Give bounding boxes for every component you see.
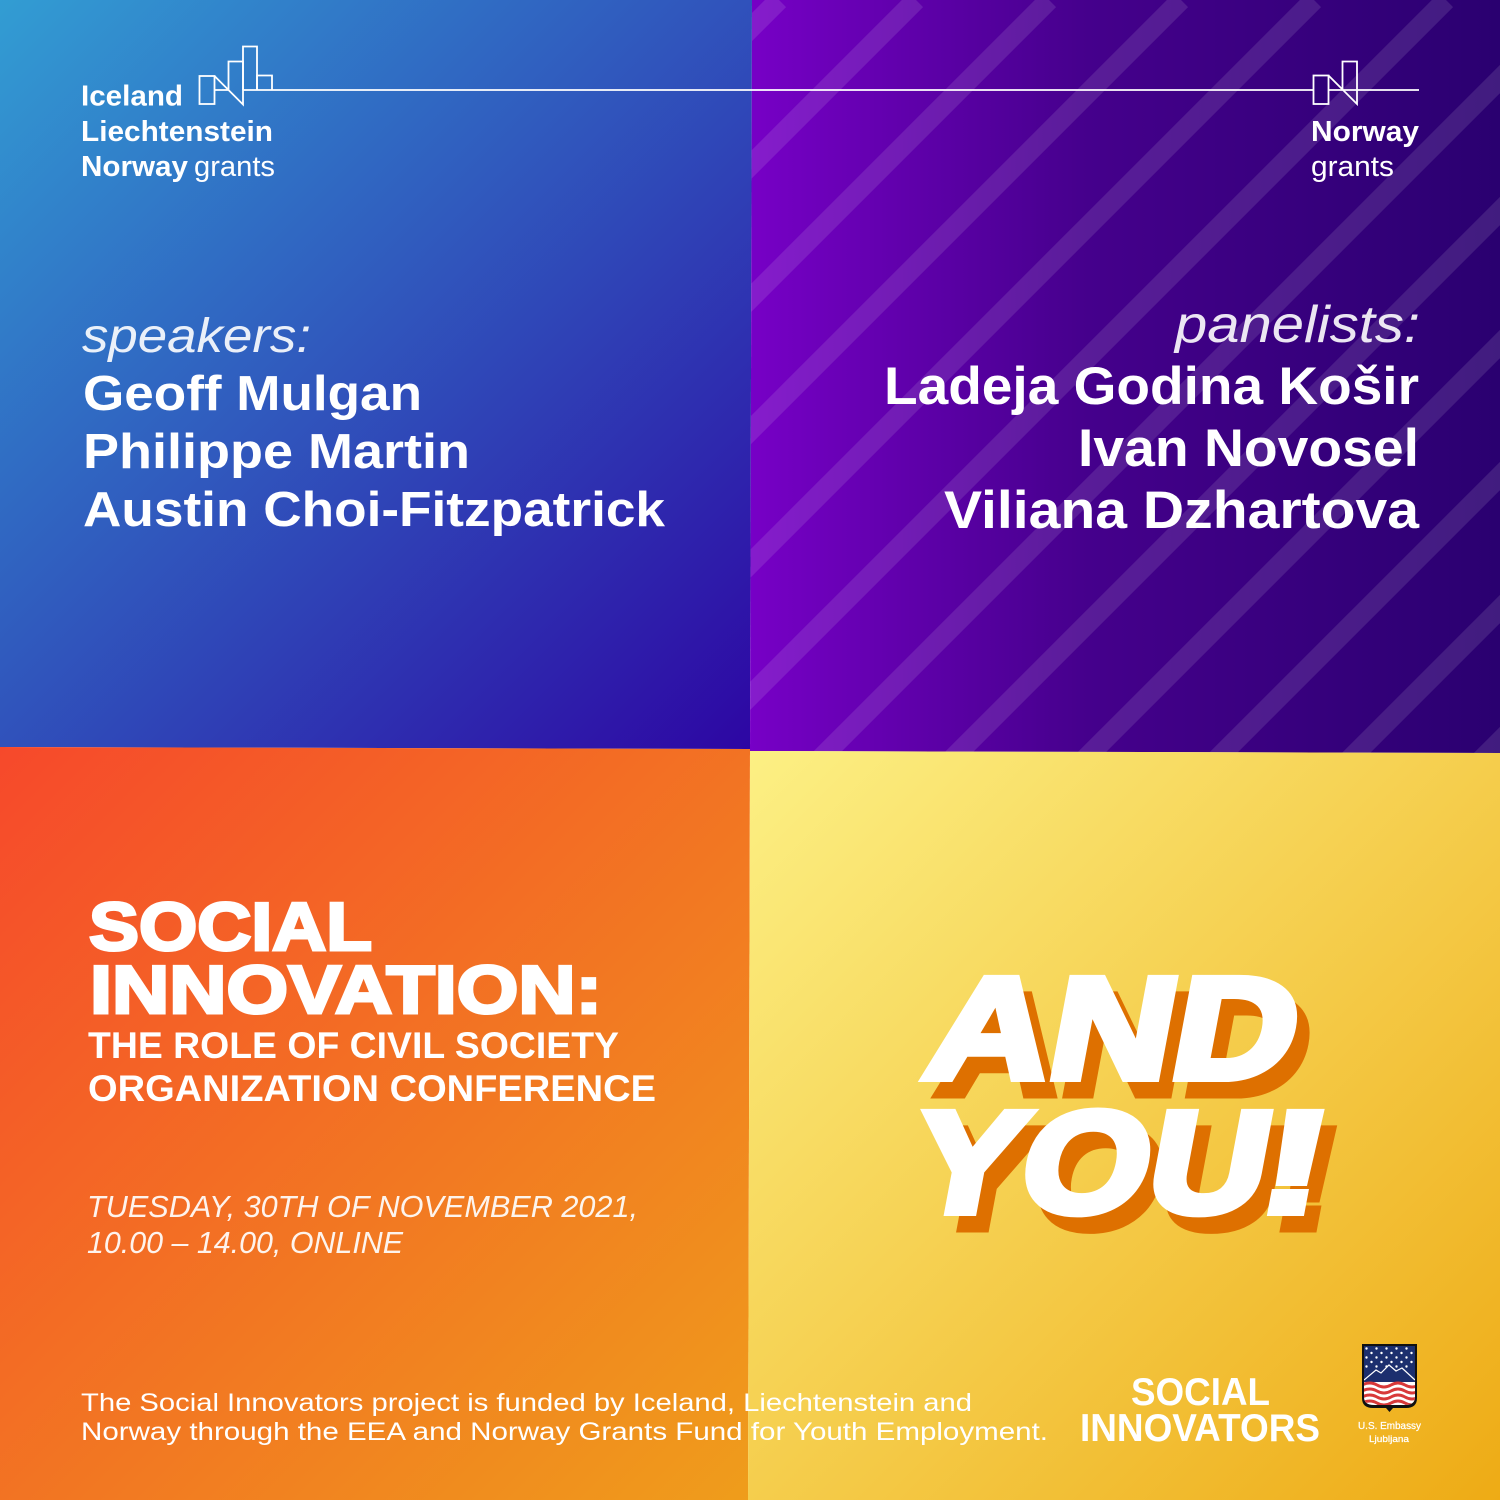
logo: U.S. Embassy Ljubljana bbox=[1358, 1344, 1422, 1445]
logo: Iceland Liechtenstein Norway grants bbox=[81, 46, 275, 183]
headline shadow: AND bbox=[928, 965, 1326, 1125]
text: Norway grants: Norway bbox=[1311, 116, 1419, 148]
text block: date and time: TUESDAY, 30TH OF NOVEMBER 2021, bbox=[87, 1189, 638, 1224]
speaker names: Philippe Martin bbox=[83, 425, 470, 479]
headline white text: YOU bbox=[900, 1082, 1284, 1243]
headline shadow: ! bbox=[1262, 1099, 1355, 1259]
panel: orange conference background bbox=[0, 747, 750, 1500]
panel: purple panelists background bbox=[750, 0, 1500, 753]
subtitle: conference name bbox=[88, 1025, 656, 1109]
logo: Social Innovators: SOCIAL bbox=[1131, 1371, 1270, 1414]
logo: Norway grants bbox=[1311, 62, 1419, 183]
headline: And You bbox=[900, 948, 1355, 1259]
text: embassy name: U.S. Embassy bbox=[1358, 1420, 1422, 1432]
subtitle: conference name: THE ROLE OF CIVIL SOCIETY bbox=[88, 1025, 619, 1066]
speaker names: Austin Choi-Fitzpatrick bbox=[83, 483, 666, 537]
heading: panelists: panelists: bbox=[1173, 296, 1420, 354]
text block: speakers bbox=[82, 310, 666, 537]
text block: date and time bbox=[87, 1189, 638, 1260]
icon: Norway bars bbox=[1314, 62, 1357, 104]
text: donor countries: Norway bbox=[81, 151, 188, 183]
speaker names bbox=[83, 367, 666, 537]
icon: embassy shield bbox=[1362, 1344, 1419, 1412]
text: embassy name: Ljubljana bbox=[1369, 1434, 1410, 1445]
speaker names: Geoff Mulgan bbox=[83, 367, 422, 421]
text block: funding note: The Social Innovators project is funded by Iceland, Liechtenstein and bbox=[81, 1389, 972, 1417]
panel: blue speakers background bbox=[0, 0, 752, 749]
title: Social Innovation: SOCIAL bbox=[89, 889, 372, 965]
logo: Social Innovators: INNOVATORS bbox=[1080, 1407, 1320, 1450]
text: donor countries: Liechtenstein bbox=[81, 116, 273, 148]
logo: Social Innovators bbox=[1080, 1371, 1320, 1450]
title: Social Innovation bbox=[89, 889, 602, 1028]
headline shadow: YOU bbox=[913, 1099, 1297, 1259]
text: Norway grants: grants bbox=[1311, 151, 1394, 183]
panelist names: Ladeja Godina Košir bbox=[884, 357, 1419, 416]
subtitle: conference name: ORGANIZATION CONFERENCE bbox=[88, 1068, 656, 1109]
text block: panelists bbox=[884, 296, 1420, 540]
icon: skyline bars bbox=[200, 46, 272, 104]
text: Norway grants bbox=[1311, 116, 1419, 183]
text block: funding note bbox=[81, 1389, 1048, 1446]
headline shadow bbox=[913, 965, 1355, 1259]
headline white text bbox=[900, 948, 1342, 1243]
panelist names: Ivan Novosel bbox=[1078, 419, 1419, 478]
headline white text: ! bbox=[1249, 1082, 1342, 1243]
text block: date and time: 10.00 – 14.00, ONLINE bbox=[87, 1225, 403, 1260]
panelist names bbox=[884, 357, 1420, 540]
text block: funding note: Norway through the EEA and Norway Grants Fund for Youth Employment. bbox=[81, 1418, 1048, 1446]
heading: speakers: speakers: bbox=[82, 310, 311, 363]
text: donor countries: Iceland bbox=[81, 80, 183, 112]
text: donor countries bbox=[81, 80, 275, 183]
text: donor countries: grants bbox=[194, 151, 275, 183]
text: embassy name bbox=[1358, 1420, 1422, 1445]
title: Social Innovation: INNOVATION: bbox=[90, 952, 602, 1028]
panelist names: Viliana Dzhartova bbox=[944, 481, 1420, 540]
divider line joining the logos bbox=[243, 89, 1419, 91]
headline white text: AND bbox=[915, 948, 1313, 1109]
panel: yellow and you background bbox=[748, 751, 1500, 1500]
